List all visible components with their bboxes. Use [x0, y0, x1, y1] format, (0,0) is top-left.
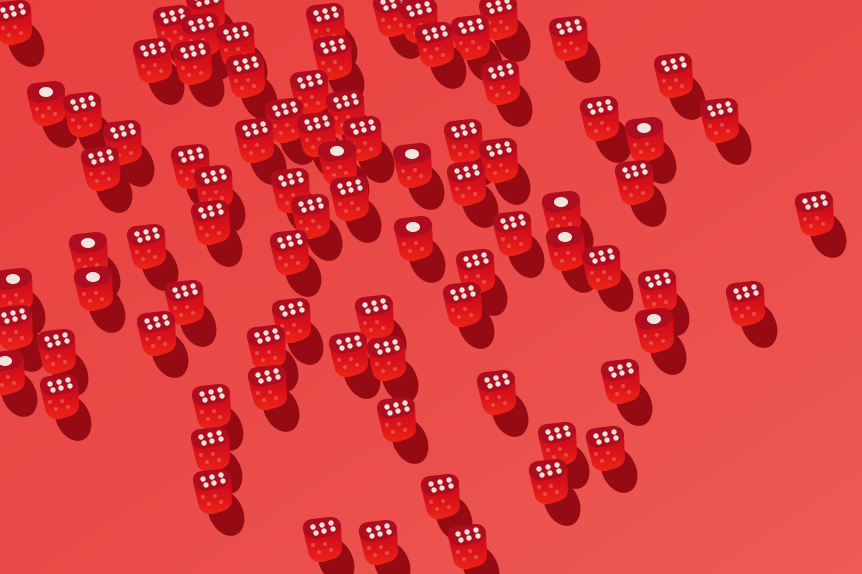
dice cluster: top right	[549, 16, 854, 264]
dice cluster: bottom	[303, 359, 660, 574]
dice cluster: middle right	[393, 119, 785, 381]
dice cluster: top left	[0, 0, 285, 219]
dice cluster: left	[0, 224, 224, 447]
dice cluster: centre	[171, 70, 402, 303]
dice cluster: top centre	[306, 0, 540, 133]
dice cluster: lower centre	[191, 295, 436, 542]
